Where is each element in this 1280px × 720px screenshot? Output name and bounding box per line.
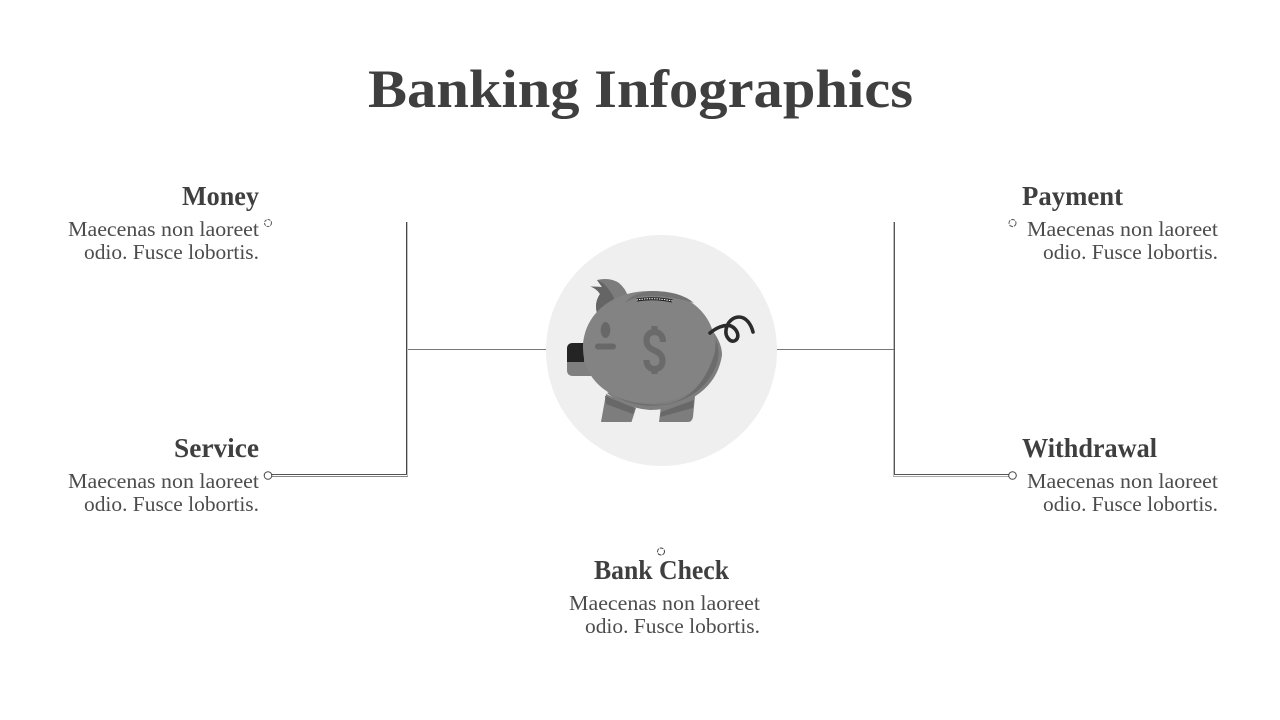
body text: odio. Fusce lobortis. <box>1043 492 1218 516</box>
body text: odio. Fusce lobortis. <box>84 240 259 264</box>
marker: money <box>264 220 272 226</box>
body text: Maecenas non laoreet <box>68 469 259 493</box>
marker: payment <box>1009 220 1016 226</box>
marker: bank check <box>658 548 664 555</box>
pig top band <box>625 291 694 303</box>
dollar sign <box>646 326 663 374</box>
body text: Maecenas non laoreet <box>1027 217 1218 241</box>
body text: Maecenas non laoreet <box>569 591 760 615</box>
coin slot <box>636 299 672 301</box>
body text: odio. Fusce lobortis. <box>585 614 760 638</box>
heading: Money <box>182 181 259 211</box>
block: withdrawal <box>1022 433 1218 516</box>
pig belly stripe <box>617 340 718 406</box>
block: bank check <box>569 555 760 638</box>
icon: piggy bank in circle <box>546 235 777 466</box>
body text <box>68 469 259 516</box>
block: payment <box>1022 181 1218 264</box>
block: service <box>68 433 259 516</box>
body text: odio. Fusce lobortis. <box>84 492 259 516</box>
body text: odio. Fusce lobortis. <box>1043 240 1218 264</box>
body text <box>1027 217 1218 264</box>
body text: Maecenas non laoreet <box>68 217 259 241</box>
heading: Bank Check <box>594 555 729 585</box>
heading: Withdrawal <box>1022 433 1157 463</box>
marker: withdrawal <box>1009 472 1016 479</box>
pig snout <box>567 343 595 376</box>
heading: Payment <box>1022 181 1123 211</box>
heading: Service <box>174 433 259 463</box>
title: Banking Infographics <box>368 59 913 119</box>
pig body <box>583 291 715 403</box>
body text: Maecenas non laoreet <box>1027 469 1218 493</box>
pig inner ear <box>590 280 615 313</box>
connector: left bracket <box>272 222 547 477</box>
coin slot highlight <box>636 299 672 301</box>
pig body shadow crescent <box>607 330 722 410</box>
body text <box>569 591 760 638</box>
marker: service <box>264 472 272 479</box>
pig eye <box>601 322 610 338</box>
pig back leg <box>659 396 695 422</box>
pig mouth <box>595 344 616 350</box>
block: money <box>68 181 259 264</box>
connector: right bracket <box>777 222 1009 477</box>
pig front leg <box>601 394 636 422</box>
pig ear <box>590 279 628 313</box>
body text <box>68 217 259 264</box>
body text <box>1027 469 1218 516</box>
pig tail <box>710 317 753 341</box>
pig snout dark end <box>567 343 584 362</box>
pig leg shadows <box>605 396 694 417</box>
